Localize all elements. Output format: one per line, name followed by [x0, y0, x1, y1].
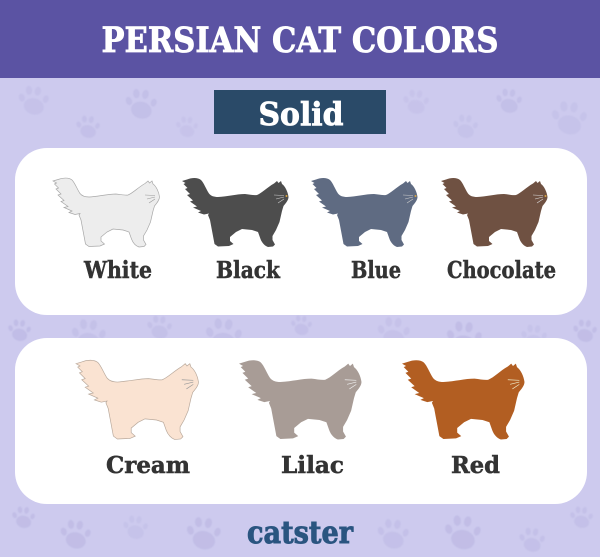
section heading: Solid	[214, 90, 386, 134]
title: PERSIAN CAT COLORS	[102, 20, 498, 61]
label: Black: Black	[216, 257, 281, 284]
panel: top row of cats	[15, 148, 587, 315]
section heading: Solid: Solid	[258, 95, 344, 133]
header banner	[0, 0, 600, 78]
cat: cream	[76, 360, 198, 440]
label: Blue: Blue	[351, 257, 401, 284]
cat: white	[53, 178, 160, 247]
cat: lilac	[239, 360, 361, 440]
label: Lilac: Lilac	[281, 452, 344, 479]
label: White: White	[83, 257, 152, 284]
cat: chocolate	[441, 178, 548, 247]
cat: black	[182, 178, 288, 247]
cat: blue	[311, 178, 418, 247]
label: Cream: Cream	[106, 452, 190, 479]
logo: catster: catster	[247, 515, 354, 551]
panel: bottom row of cats	[15, 338, 587, 504]
label: Chocolate: Chocolate	[447, 257, 556, 284]
cat: red	[402, 360, 524, 440]
label: Red: Red	[451, 452, 500, 479]
